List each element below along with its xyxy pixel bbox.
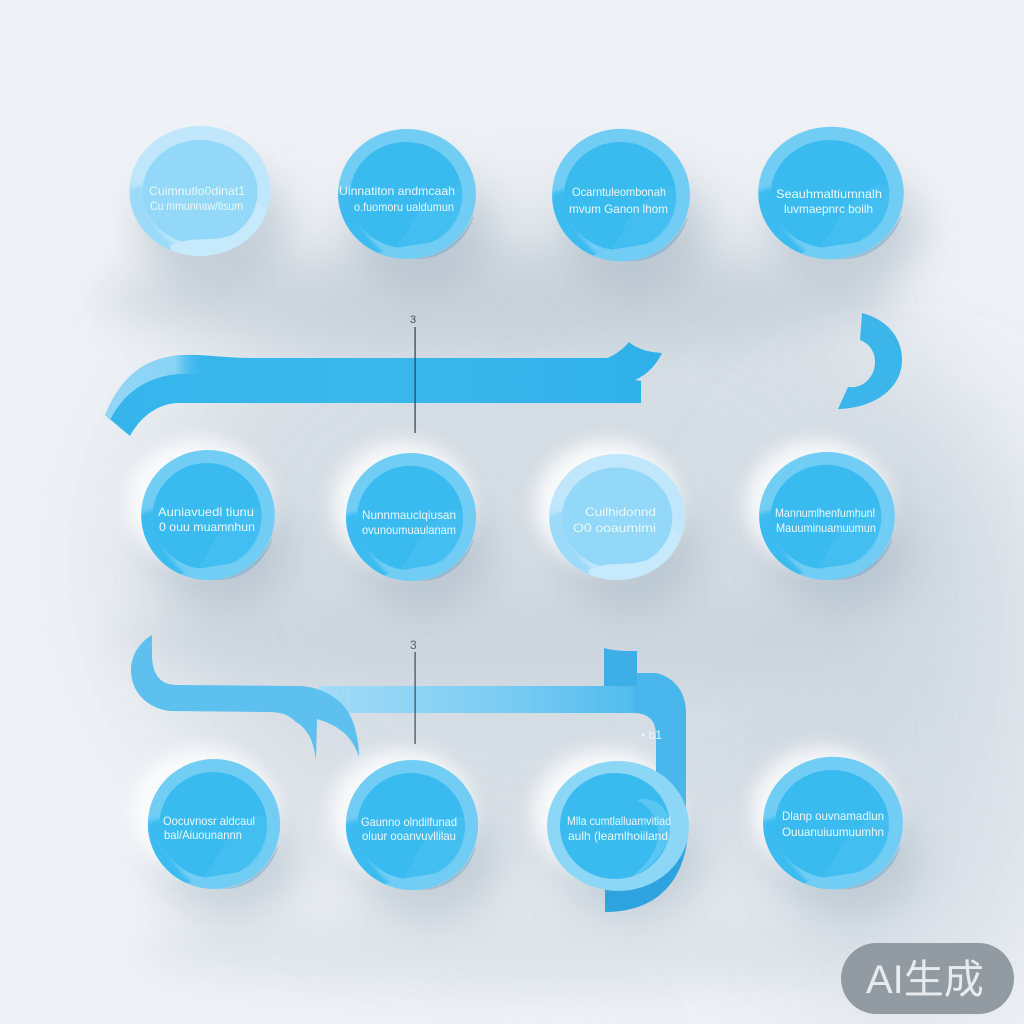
disc 2: o.fuomoru ualdumun (354, 200, 454, 214)
disc 7: Cuilhidonnd (585, 505, 656, 519)
disc 5: 0 ouu muamnhun (159, 520, 255, 534)
disc 9: Oocuvnosr aldcaul (163, 814, 255, 828)
disc 3: Ocarntuleombonah (572, 185, 666, 199)
disc 6 (337, 453, 484, 594)
disc 12: Dlanp ouvnamadlun (782, 809, 884, 823)
disc 1: Cuimnutlo0dinat1 (149, 184, 245, 198)
disc 7: O0 ooaumimi (573, 521, 656, 535)
disc 4: luvmaepnrc boilh (784, 202, 873, 216)
disc 11: aulh (leamlhoiiland (568, 829, 668, 843)
disc 4 (748, 127, 912, 273)
disc 6: Nunnmauclqiusan (362, 508, 456, 522)
disc 1 (119, 126, 279, 269)
watermark badge: AI生成 (866, 958, 984, 1002)
leader line: lower: 3 (410, 638, 417, 652)
ribbon: lower connector (131, 635, 688, 912)
disc 5 (132, 450, 282, 593)
disc 7 (539, 454, 693, 593)
disc 12: Ouuanuiuumuumhn (782, 825, 884, 839)
ribbon: lower connector: • b1 (641, 728, 662, 742)
ribbon: right arc fragment (838, 313, 902, 409)
disc 1: Cu mmunnaw/tisum (150, 199, 243, 213)
disc 11: Mlla cumtlalluamvitiad (567, 814, 671, 828)
watermark badge (841, 943, 1014, 1014)
disc 3 (542, 129, 698, 275)
disc 4: Seauhmaltiumnalh (776, 187, 882, 201)
leader line: upper: 3 (410, 314, 416, 326)
disc 9: bal/Aiuounannn (164, 828, 242, 842)
disc 10: Gaunno olndilfunad (361, 815, 457, 829)
disc 10 (336, 760, 486, 903)
disc 3: mvum Ganon lhom (569, 202, 668, 216)
disc 9 (138, 759, 288, 902)
leader line: upper (410, 314, 416, 433)
disc 10: oluur ooanvuvllilau (362, 829, 456, 843)
disc 2 (328, 129, 484, 272)
ribbon: upper connector (105, 342, 662, 436)
disc 2: Uinnatiton andmcaah (339, 184, 455, 198)
disc 8: Mauuminuamuumun (776, 521, 876, 535)
disc 11 (547, 761, 689, 891)
disc 5: Auniavuedl tiunu (158, 505, 254, 519)
disc 8: Mannumlhenfumhunl (775, 506, 875, 520)
disc 12 (753, 757, 911, 903)
leader line: lower (410, 638, 417, 744)
disc 6: ovunoumuaulanam (362, 523, 456, 537)
disc 8 (749, 452, 903, 593)
